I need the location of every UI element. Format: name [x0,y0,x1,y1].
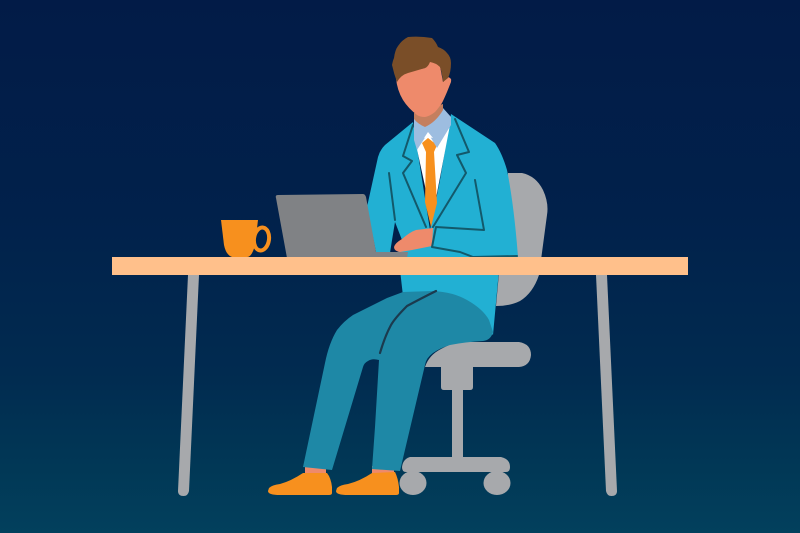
gap between arm and torso [390,222,402,253]
mug body [221,220,258,257]
jacket [367,114,518,257]
trouser seam [380,291,436,353]
necktie [422,138,437,227]
desk [112,257,688,496]
mug handle [252,227,271,251]
shirt collar [414,108,451,150]
hand [394,228,433,252]
ankles [305,466,394,475]
desk top [112,257,688,275]
desk legs [178,275,199,496]
neck shadow [414,104,443,127]
white collar point [424,132,433,138]
shirt [415,125,450,226]
jacket lower [400,270,499,335]
trousers [303,291,493,471]
laptop [276,194,408,258]
person [268,37,518,495]
shoes [268,472,399,495]
office chair [400,173,548,495]
jacket lines [389,119,517,257]
coffee mug [221,220,271,257]
face [396,60,451,117]
hair [392,37,451,82]
